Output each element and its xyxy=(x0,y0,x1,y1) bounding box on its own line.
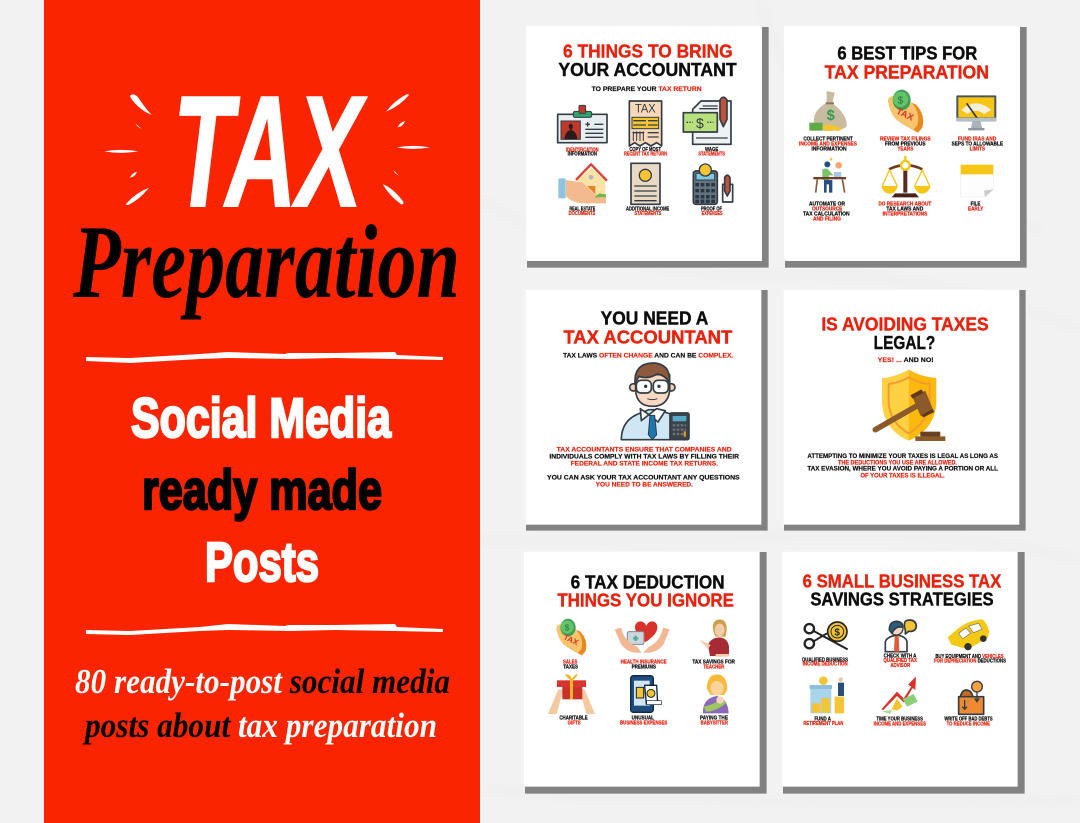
label: sales taxes xyxy=(563,660,578,671)
label: collect information: INFORMATION xyxy=(811,147,847,153)
heading xyxy=(803,571,1002,610)
label: retirement plan xyxy=(803,717,844,727)
body text xyxy=(807,454,998,479)
label: qualified tax advisor: QUALIFIED TAX xyxy=(883,658,917,664)
label: sales taxes: TAXES xyxy=(563,665,578,671)
label: real estate: REAL ESTATE xyxy=(569,207,596,213)
panel: red cover xyxy=(44,0,480,823)
tagline line 1: 80 ready-to-post social media xyxy=(75,662,450,701)
icon: calculator with coin xyxy=(693,164,733,204)
subheading: YES! ... AND NO! xyxy=(878,357,934,364)
icon: shield and gavel xyxy=(875,370,945,441)
label: review tax filings: YEARS xyxy=(897,147,914,153)
body text: YOU CAN ASK YOUR TAX ACCOUNTANT ANY QUESTIONS xyxy=(547,475,740,481)
label: file early: FILE xyxy=(971,202,981,208)
icon: wage check: $ xyxy=(696,115,704,131)
icon: babysitter with baby xyxy=(703,674,729,713)
heading xyxy=(825,42,989,82)
label: unusual business expenses: BUSINESS EXPENSES xyxy=(620,720,668,726)
label: paying the babysitter: PAYING THE xyxy=(700,715,728,721)
label: teacher savings: TAX SAVINGS FOR xyxy=(692,660,735,666)
label: real estate: DOCUMENTS xyxy=(569,211,596,217)
label: additional income xyxy=(626,207,670,217)
heading: LEGAL? xyxy=(874,332,935,353)
label: proof of expenses: PROOF OF xyxy=(701,207,722,213)
icon: scissors and coin xyxy=(805,622,848,649)
icon: tax piggy bank: $ xyxy=(565,622,570,632)
label: equipment and vehicles: BUY EQUIPMENT AND VEHICLES xyxy=(935,654,1004,660)
label: fund iras: LIMITS xyxy=(970,147,985,153)
label: equipment and vehicles: FOR DEPRECIATION DEDUCTIONS xyxy=(934,659,1006,665)
body text xyxy=(547,447,740,489)
icon: tax piggy bank: $ xyxy=(898,95,904,106)
label: charitable gifts xyxy=(559,715,588,726)
heading xyxy=(557,571,734,611)
label: review tax filings: FROM PREVIOUS xyxy=(885,142,926,148)
label: paying the babysitter: BABYSITTER xyxy=(701,720,728,726)
icon: income statement document xyxy=(631,163,660,204)
label: identification: IDENTIFICATION xyxy=(566,147,599,153)
label: qualified business income: INCOME DEDUCTION xyxy=(803,662,848,668)
icon: real estate house in hand xyxy=(558,164,607,203)
label: teacher savings xyxy=(692,660,735,671)
label: unusual business expenses xyxy=(620,715,668,726)
label: real estate xyxy=(569,207,596,217)
panel: card 5, tax deduction things you ignore xyxy=(524,552,767,794)
label: file early: EARLY xyxy=(968,207,984,213)
label: automate or outsource: TAX CALCULATION xyxy=(803,212,850,218)
label: qualified tax advisor xyxy=(883,653,917,669)
body text: THE DEDUCTIONS YOU USE ARE ALLOWED. xyxy=(838,461,957,467)
divider: upper chalk line xyxy=(86,352,443,363)
label: collect information xyxy=(799,137,858,153)
label: do research: DO RESEARCH ABOUT xyxy=(878,202,932,208)
label: time your business: TIME YOUR BUSINESS xyxy=(876,717,923,723)
label: tax return copy: RECENT TAX RETURN xyxy=(624,152,667,158)
icon: monitor gauge xyxy=(956,95,996,130)
heading: Posts: Posts xyxy=(205,530,319,593)
label: health insurance: PREMIUMS xyxy=(632,665,656,671)
icon: sparkle strokes xyxy=(104,94,430,205)
icon: tax piggy bank: TAX xyxy=(562,633,580,647)
heading xyxy=(558,41,737,80)
label: do research: TAX LAWS AND xyxy=(886,207,924,213)
label: review tax filings xyxy=(880,137,931,153)
label: proof of expenses: EXPENSES xyxy=(702,211,723,217)
icon: person at desk xyxy=(813,158,846,193)
heading: 6 TAX DEDUCTION xyxy=(571,571,725,592)
body text: FEDERAL AND STATE INCOME TAX RETURNS. xyxy=(571,462,718,468)
label: teacher savings: TEACHER xyxy=(703,665,725,671)
panel: card 1, things to bring your accountant xyxy=(526,26,769,268)
label: automate or outsource: AND FILING xyxy=(813,217,841,223)
panel: card 2, best tips for tax preparation xyxy=(784,26,1027,268)
heading: 6 THINGS TO BRING xyxy=(563,41,733,62)
label: retirement plan: FUND A xyxy=(814,717,831,723)
label: review tax filings: REVIEW TAX FILINGS xyxy=(880,137,931,143)
label: equipment and vehicles xyxy=(934,654,1006,665)
title word: Preparation: Preparation xyxy=(72,203,460,320)
label: charitable gifts: GIFTS xyxy=(568,720,581,726)
label: fund iras: FUND IRAS AND xyxy=(958,137,997,143)
icon: tax advisor xyxy=(885,620,916,652)
icon: bad debts box xyxy=(959,681,984,714)
heading xyxy=(563,308,732,348)
label: write off bad debts: TO REDUCE INCOME xyxy=(947,721,990,727)
heading: Social Media: Social Media xyxy=(131,386,392,449)
heading: YOU NEED A xyxy=(601,308,708,329)
icon: health insurance hands xyxy=(615,621,670,653)
label: automate or outsource xyxy=(803,202,850,223)
heading: THINGS YOU IGNORE xyxy=(557,590,734,611)
icon: money bag: $ xyxy=(827,108,835,124)
heading: IS AVOIDING TAXES xyxy=(821,313,989,334)
icon: teacher xyxy=(699,619,729,657)
label: write off bad debts: WRITE OFF BAD DEBTS xyxy=(944,717,993,723)
icon: wage check xyxy=(683,97,731,144)
subheading: TO PREPARE YOUR TAX RETURN xyxy=(592,86,702,93)
body text: ATTEMPTING TO MINIMIZE YOUR TAXES IS LEGAL AS LONG AS xyxy=(807,454,998,460)
label: do research xyxy=(878,202,932,218)
heading: SAVINGS STRATEGIES xyxy=(810,589,994,610)
label: sales taxes: SALES xyxy=(563,660,578,666)
label: unusual business expenses: UNUSUAL xyxy=(632,715,654,721)
icon: rising arrow with money xyxy=(881,677,918,714)
icon: tax return receipt: TAX xyxy=(635,102,656,116)
label: health insurance: HEALTH INSURANCE xyxy=(621,660,667,666)
label: automate or outsource: AUTOMATE OR xyxy=(809,202,845,208)
label: retirement plan: RETIREMENT PLAN xyxy=(803,721,844,727)
icon: gift box xyxy=(548,675,595,714)
divider: lower chalk line xyxy=(86,624,443,635)
label: additional income: ADDITIONAL INCOME xyxy=(626,207,670,213)
subheading: TAX LAWS OFTEN CHANGE AND CAN BE COMPLEX. xyxy=(563,352,733,359)
label: proof of expenses xyxy=(701,207,723,217)
label: fund iras: SEPS TO ALLOWABLE xyxy=(952,142,1003,148)
heading: YOUR ACCOUNTANT xyxy=(558,59,737,80)
heading: 6 SMALL BUSINESS TAX xyxy=(803,571,1002,592)
panel: card 6, small business tax savings strategies xyxy=(782,552,1025,794)
body text: OF YOUR TAXES IS ILLEGAL. xyxy=(860,473,945,479)
label: time your business: INCOME AND EXPENSES xyxy=(874,721,926,727)
icon: sticky note xyxy=(961,165,993,197)
icon: yellow car xyxy=(948,619,989,650)
icon: money bag xyxy=(809,91,847,131)
icon: retirement jar and coins xyxy=(810,676,844,713)
label: qualified tax advisor: ADVISOR xyxy=(890,663,911,669)
icon: tax piggy bank xyxy=(556,619,586,655)
panel: card 4, is avoiding taxes legal xyxy=(784,290,1026,531)
panel: card 3, you need a tax accountant xyxy=(526,290,768,531)
label: additional income: STATEMENTS xyxy=(634,211,662,217)
label: tax return copy: COPY OF MOST xyxy=(629,147,662,153)
label: file early xyxy=(968,202,984,213)
icon: phone with business expenses xyxy=(631,676,661,712)
label: write off bad debts xyxy=(944,717,993,727)
label: identification: INFORMATION xyxy=(568,152,597,158)
heading: 6 BEST TIPS FOR xyxy=(837,42,977,63)
label: tax return copy xyxy=(624,147,667,158)
icon: accountant with calculator xyxy=(621,363,689,440)
heading: ready made: ready made xyxy=(142,458,382,521)
label: wage statements: STATEMENTS xyxy=(698,152,725,158)
label: qualified business income xyxy=(802,657,848,668)
heading: TAX ACCOUNTANT xyxy=(563,327,732,348)
label: wage statements: WAGE xyxy=(705,147,719,153)
body text: TAX EVASION, WHERE YOU AVOID PAYING A PORTION OR ALL xyxy=(807,467,998,473)
title word: TAX: TAX xyxy=(173,64,367,240)
icon: scales of justice xyxy=(881,156,931,197)
heading: TAX PREPARATION xyxy=(825,61,989,82)
label: qualified business income: QUALIFIED BUSINESS xyxy=(802,657,848,663)
label: fund iras xyxy=(952,137,1003,153)
icon: tax piggy bank xyxy=(888,90,923,133)
label: qualified tax advisor: CHECK WITH A xyxy=(884,653,917,659)
icon: id card xyxy=(558,105,607,143)
label: automate or outsource: OUTSOURCE xyxy=(812,207,843,213)
body text: TAX ACCOUNTANTS ENSURE THAT COMPANIES AND xyxy=(557,447,732,453)
body text: INDIVIDUALS COMPLY WITH TAX LAWS BY FILLING THEIR xyxy=(549,455,740,461)
tagline line 2: posts about tax preparation xyxy=(82,706,437,745)
label: charitable gifts: CHARITABLE xyxy=(559,715,588,721)
label: health insurance xyxy=(621,660,667,671)
label: identification xyxy=(566,147,599,158)
label: paying the babysitter xyxy=(700,715,728,726)
label: collect information: COLLECT PERTINENT xyxy=(803,137,853,143)
body text: YOU NEED TO BE ANSWERED. xyxy=(596,483,693,489)
label: collect information: INCOME AND EXPENSES xyxy=(799,142,858,148)
icon: tax piggy bank: TAX xyxy=(895,106,916,123)
label: wage statements xyxy=(698,147,725,158)
label: time your business xyxy=(874,717,926,727)
icon: tax return receipt xyxy=(629,101,662,146)
icon: scissors and coin: $ xyxy=(834,628,840,639)
heading xyxy=(821,313,989,353)
label: do research: INTERPRETATIONS xyxy=(883,212,928,218)
